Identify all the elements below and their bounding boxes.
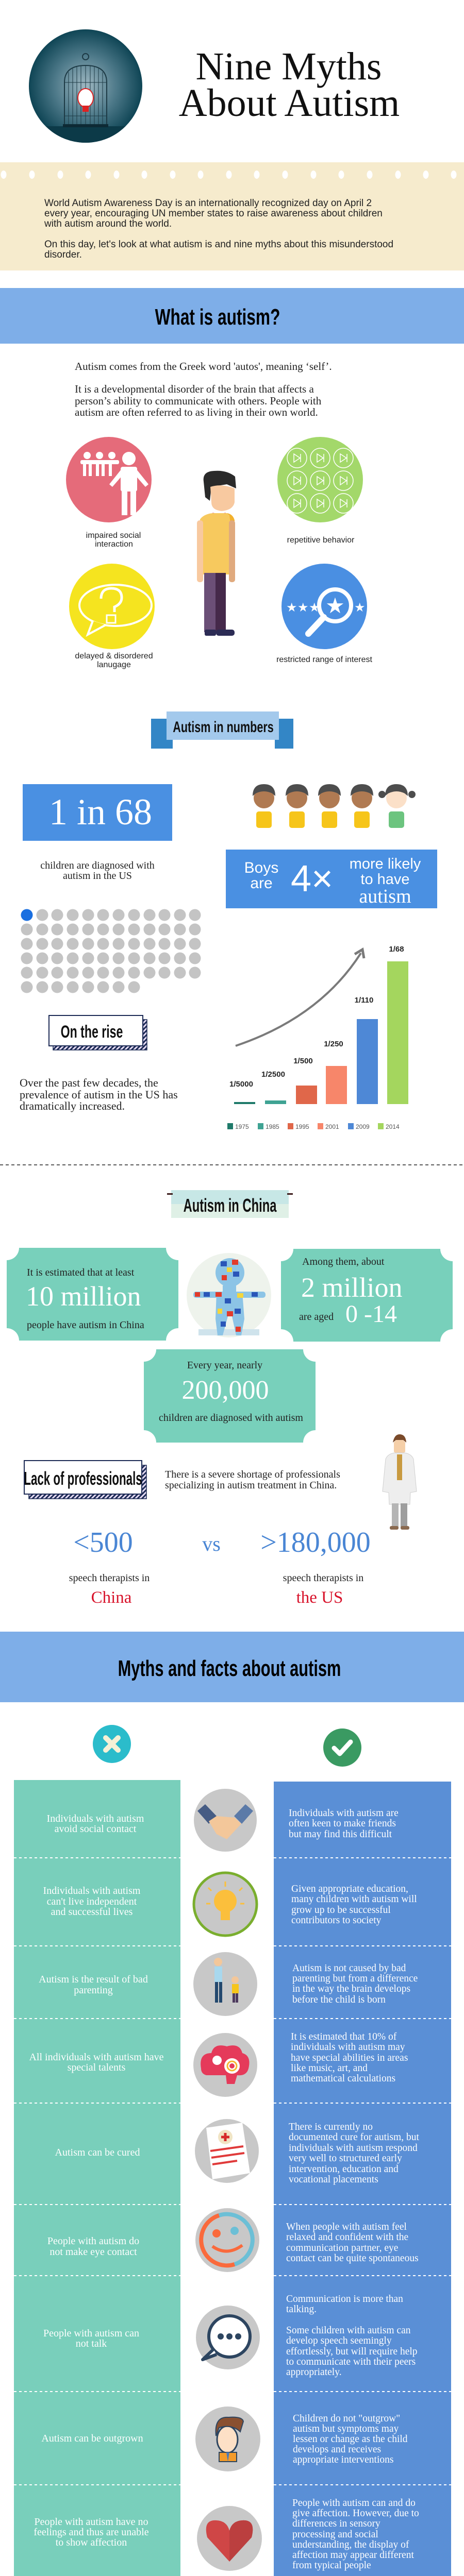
column: facts: lessen or change as the child (293, 2434, 408, 2445)
panel: 200,000 per year (144, 1349, 316, 1443)
icon: medical report (195, 2119, 259, 2183)
comparison: therapists China vs US: the US (296, 1588, 343, 1607)
column: facts: contact can be quite spontaneous (286, 2253, 419, 2264)
column: facts: many children with autism will (291, 1894, 417, 1905)
text: children diagnosed: autism in the US (63, 870, 132, 882)
label: delayed & disordered language: delayed & disordered (75, 652, 153, 660)
column: facts: It is estimated that 10% of (291, 2031, 397, 2042)
column: facts: differences in sensory (292, 2518, 380, 2529)
stat: boys 4x more likely (226, 850, 437, 908)
column: facts (274, 1782, 451, 2576)
column: facts: Given appropriate education, (291, 1884, 408, 1894)
icon: restricted range of interest: ★ (354, 601, 366, 615)
column: facts: intervention, education and (289, 2164, 399, 2175)
definition text: person’s ability to communicate with others. People with (75, 395, 322, 407)
bar chart: prevalence over time: 2001 (325, 1123, 339, 1130)
column: facts: Individuals with autism are (289, 1808, 399, 1819)
icon: restricted range of interest: ★ (309, 601, 320, 615)
comparison: therapists China vs US: China (91, 1588, 132, 1607)
panel: 200,000 per year: 200,000 (181, 1376, 269, 1405)
icon: delayed & disordered language (69, 564, 155, 649)
label: impaired social interaction: impaired social (86, 531, 141, 540)
column: facts: relaxed and confident with the (286, 2232, 408, 2243)
column: myths: All individuals with autism have (29, 2052, 164, 2063)
label: restricted range of interest: restricted range of interest (276, 655, 372, 664)
bar chart: prevalence over time: 2014 (386, 1123, 400, 1130)
column: myths: not talk (76, 2338, 107, 2349)
column: facts: affection may appear different (292, 2550, 414, 2561)
label box: On the rise (49, 1015, 147, 1050)
column: myths: People with autism do (47, 2235, 139, 2247)
icon: handshake (194, 1789, 257, 1852)
bar chart: prevalence over time: 1/110 (355, 996, 373, 1005)
ribbon: Autism in numbers (151, 711, 293, 749)
column: facts: contributors to society (291, 1915, 382, 1926)
panel: 200,000 per year: children are diagnosed with autism (159, 1412, 303, 1423)
column: myths: Individuals with autism (47, 1813, 144, 1824)
comparison: therapists China vs US: >180,000 (260, 1527, 371, 1558)
stat: boys 4x more likely: Boys (244, 859, 278, 876)
column: facts: but may find this difficult (289, 1829, 392, 1840)
intro panel: with autism around the world. (44, 218, 172, 229)
intro panel: every year, encouraging UN member states to raise awareness about children (44, 208, 383, 219)
intro panel: On this day, let's look at what autism is and nine myths about this misunderstood (44, 239, 393, 250)
column: facts: grow up to be successful (291, 1905, 391, 1916)
column: myths: Autism can be outgrown (41, 2433, 143, 2444)
bar chart: prevalence over time: 2009 (356, 1123, 370, 1130)
stat: boys 4x more likely: to have (360, 871, 410, 888)
column: facts: in the way the brain develops (292, 1984, 410, 1994)
comparison: therapists China vs US: speech therapists in (69, 1572, 150, 1584)
column: facts: communication partner, eye (286, 2243, 398, 2253)
column: facts: from typical people (292, 2560, 371, 2571)
column: myths: Autism is the result of bad (39, 1974, 148, 1985)
column: facts: talking. (286, 2304, 317, 2315)
bar chart: prevalence over time: 1/5000 (229, 1080, 253, 1089)
column: myths: and successful lives (51, 1906, 133, 1918)
bar chart: prevalence over time: 1/68 (389, 945, 404, 954)
icon: fact check (323, 1728, 361, 1767)
definition text: autism are often referred to as living in their own world. (75, 406, 318, 418)
label box: On the rise: On the rise (61, 1023, 123, 1042)
column: facts: autism but symptoms may (293, 2424, 399, 2434)
label box: Lack of professionals (24, 1461, 146, 1499)
text: shortage of professionals: specializing in autism treatment in China. (165, 1480, 337, 1491)
column: facts: like music, art, and (291, 2063, 368, 2074)
label: delayed & disordered language: lanugage (97, 660, 131, 669)
stat: boys 4x more likely: are (250, 875, 273, 892)
heading: Myths and facts about autism (0, 1632, 464, 1702)
panel: 2 million aged 0-14 (281, 1249, 453, 1342)
bar chart: prevalence over time: 1985 (266, 1123, 279, 1130)
comparison: therapists China vs US: speech therapists in (283, 1572, 363, 1584)
text: children diagnosed: children are diagnosed with (40, 860, 155, 871)
column: facts: There is currently no (289, 2122, 373, 2132)
column: facts: understanding, the display of (292, 2539, 409, 2550)
column: facts: individuals with autism may (291, 2042, 405, 2053)
column: facts: have special abilities in areas (291, 2053, 408, 2063)
column: facts: parenting but from a difference (292, 1973, 418, 1984)
column: facts: Some children with autism can (286, 2325, 411, 2336)
label: impaired social interaction: interaction (95, 540, 133, 549)
panel: 200,000 per year: Every year, nearly (187, 1360, 262, 1371)
column: facts: documented cure for autism, but (289, 2132, 419, 2143)
comparison: therapists China vs US: <500 (73, 1527, 133, 1558)
panel: 10 million (7, 1248, 178, 1341)
label: Autism in China (167, 1190, 293, 1218)
heading: What is autism? (0, 288, 464, 344)
icon: brain with gears (193, 2033, 257, 2097)
intro panel: World Autism Awareness Day is an internationally recognized day on April 2 (44, 198, 372, 209)
icon: restricted range of interest: ★ (325, 594, 345, 618)
panel: 10 million: 10 million (26, 1281, 141, 1312)
stat: 1 in 68: 1 in 68 (49, 791, 152, 833)
column: facts: vocational placements (289, 2174, 378, 2185)
column: facts: People with autism can and do (292, 2498, 416, 2509)
icon: heart (197, 2506, 262, 2571)
column: facts: When people with autism feel (286, 2222, 407, 2232)
column: facts: processing and social (292, 2529, 378, 2540)
column: myths: not make eye contact (49, 2246, 137, 2258)
column: myths: Individuals with autism (43, 1885, 141, 1896)
icon: puzzle child (187, 1253, 271, 1337)
panel: 2 million aged 0-14: 2 million (301, 1272, 403, 1303)
stat: boys 4x more likely: 4× (291, 858, 333, 900)
person illustration (197, 471, 236, 636)
icon: restricted range of interest: ★ (297, 601, 309, 615)
icon: impaired social interaction (66, 437, 152, 522)
icon: restricted range of interest (281, 564, 367, 649)
comparison: therapists China vs US: vs (202, 1532, 221, 1555)
icon: light bulb (194, 1873, 257, 1936)
text: prevalence increase (20, 1076, 178, 1112)
title: Nine Myths (196, 45, 382, 88)
icon: restricted range of interest: ★ (286, 601, 297, 615)
icon: doctor (383, 1434, 417, 1530)
label box: Lack of professionals: Lack of professionals (24, 1469, 142, 1489)
column: facts: give affection. However, due to (292, 2508, 419, 2519)
column: myths: feelings and thus are unable (34, 2527, 149, 2538)
column: facts: very well to structured early (289, 2153, 402, 2164)
label: repetitive behavior: repetitive behavior (287, 536, 355, 545)
column: myths: to show affection (56, 2537, 127, 2548)
stat: boys 4x more likely: autism (359, 886, 411, 907)
icon: speech bubble (196, 2306, 260, 2369)
column: facts: individuals with autism respond (289, 2143, 418, 2154)
panel: 2 million aged 0-14: Among them, about (302, 1256, 385, 1267)
column: myths: Autism can be cured (55, 2147, 140, 2158)
ribbon: Autism in numbers: Autism in numbers (173, 718, 274, 736)
comparison: therapists China vs US (69, 1527, 371, 1607)
bar chart: prevalence over time: 1995 (295, 1123, 309, 1130)
column: facts: to communicate with their peers (286, 2357, 416, 2367)
title (179, 45, 400, 125)
text: prevalence increase: Over the past few decades, the (20, 1076, 158, 1089)
icon: four boys and a girl (253, 784, 416, 828)
column: myths: parenting (74, 1985, 113, 1996)
definition text (75, 360, 332, 418)
text: prevalence increase: prevalence of autism in the US has (20, 1088, 178, 1101)
column: facts: before the child is born (292, 1994, 386, 2005)
text: shortage of professionals (165, 1469, 340, 1491)
icon: repetitive behavior (277, 437, 363, 522)
dot grid: 1 in 68 (21, 909, 201, 993)
icon: myth cross (93, 1725, 131, 1763)
label: Autism in China: Autism in China (184, 1195, 277, 1216)
column: myths: can't live independent (47, 1896, 137, 1907)
text: children diagnosed (40, 860, 155, 882)
column: facts: Autism is not caused by bad (292, 1963, 406, 1974)
column: facts: effortlessly, but will require help (286, 2346, 418, 2357)
column: facts: appropriately. (286, 2367, 342, 2378)
panel: 2 million aged 0-14: 0 -14 (345, 1300, 397, 1328)
column: myths: People with autism have no (34, 2516, 148, 2528)
column: myths: People with autism can (43, 2328, 139, 2339)
definition text: It is a developmental disorder of the brain that affects a (75, 383, 314, 395)
heading: Myths and facts about autism: Myths and facts about autism (118, 1656, 341, 1681)
label: impaired social interaction (86, 531, 141, 549)
stat: boys 4x more likely: more likely (350, 856, 421, 872)
heading: What is autism?: What is autism? (155, 304, 280, 330)
column: myths (14, 1780, 180, 2576)
text: shortage of professionals: There is a severe shortage of professionals (165, 1469, 340, 1480)
panel: 2 million aged 0-14: are aged (299, 1311, 334, 1323)
column: facts: Children do not "outgrow" (293, 2413, 400, 2424)
header icon: bulb in cage (29, 29, 142, 143)
bar chart: prevalence over time: 1/2500 (261, 1070, 285, 1079)
panel: 10 million: people have autism in China (27, 1319, 144, 1331)
intro panel: disorder. (44, 249, 82, 260)
icon: parent and child (193, 1952, 257, 2016)
bar chart: prevalence over time: 1/500 (293, 1057, 313, 1065)
title: About Autism (179, 81, 400, 125)
label: delayed & disordered language (75, 652, 153, 669)
column: facts: mathematical calculations (291, 2073, 395, 2084)
text: prevalence increase: dramatically increased. (20, 1099, 125, 1112)
column: myths: special talents (68, 2062, 126, 2073)
column: myths: avoid social contact (55, 1823, 137, 1835)
column: facts: appropriate interventions (293, 2454, 393, 2465)
intro panel (0, 162, 464, 270)
definition text: Autism comes from the Greek word 'autos', meaning ‘self’. (75, 360, 332, 372)
column: facts: Communication is more than (286, 2294, 403, 2304)
bar chart: prevalence over time: 1975 (235, 1123, 249, 1130)
column: facts: develop speech seemingly (286, 2335, 392, 2346)
bar chart: prevalence over time: 1/250 (324, 1040, 343, 1048)
column: facts: often keen to make friends (289, 1818, 396, 1829)
bar chart: prevalence over time (227, 945, 408, 1130)
stat: 1 in 68 (23, 784, 172, 841)
column: facts: develops and receives (293, 2444, 381, 2455)
icon: smiley face (195, 2208, 259, 2272)
icon: boy face (195, 2406, 260, 2471)
panel: 10 million: It is estimated that at least (27, 1267, 135, 1278)
